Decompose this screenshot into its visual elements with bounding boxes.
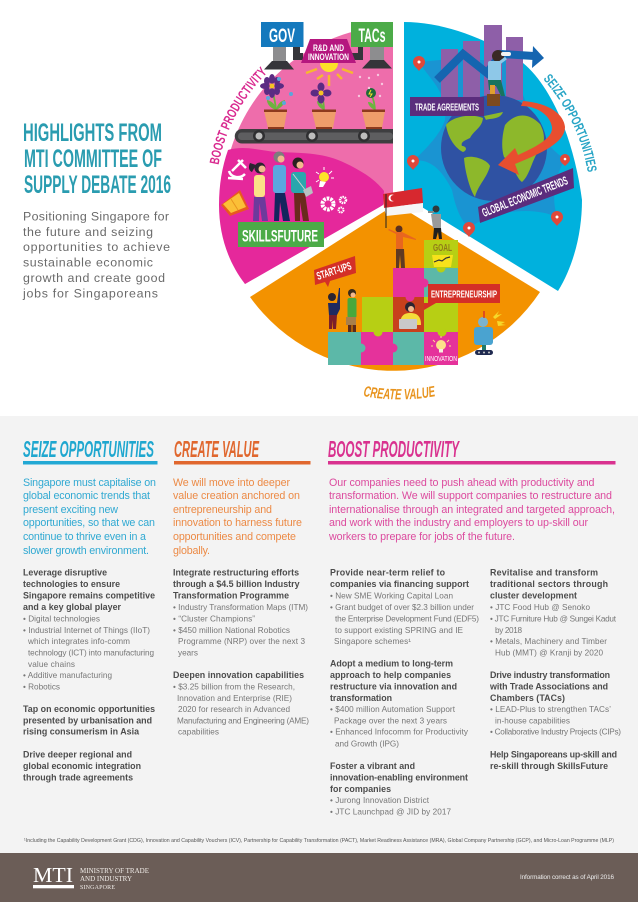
icon: sun (306, 63, 353, 86)
body text: sectors, tacs and skillsfuture: • Metals, Machinery and Timber (490, 637, 607, 646)
body text: create value: • $3.25 billion from the Research, (173, 682, 295, 692)
icon: flower pot two (310, 82, 336, 129)
body text: create value: Programme (NRP) over the next 3 (178, 637, 305, 646)
intro text: boost productivity: Our companies need to push ahead with productivity and (329, 477, 595, 489)
body text: sectors, tacs and skillsfuture: with Trade Associations and (489, 682, 608, 692)
body text: near-term relief and long-term approach: Package over the next 3 years (334, 716, 447, 726)
subtitle text block: jobs for Singaporeans (22, 286, 158, 300)
person: man looking out (428, 206, 442, 239)
body text: near-term relief and long-term approach: to support existing SPRING and IE (335, 626, 464, 635)
body text: near-term relief and long-term approach: innovation-enabling environment (330, 772, 468, 782)
r&d and innovation label: R&D AND (313, 43, 344, 54)
icon: globe (441, 95, 547, 201)
body text: sectors, tacs and skillsfuture: • JTC Food Hub @ Senoko (490, 603, 590, 612)
footnote: ¹Including the Capability Development Grant (CDG), Innovation and Capability Vouchers (ICV), Partnership for Capability Transformation (PACT), Market Readiness Assistance (MRA), Global Company Partnership (GCP), and Micro-Loan Programme (MLP) (24, 838, 614, 844)
body text: near-term relief and long-term approach (330, 568, 479, 817)
body text: create value: Transformation Programme (173, 590, 289, 600)
body text: sectors, tacs and skillsfuture: • JTC Furniture Hub @ Sungei Kadut (490, 614, 617, 624)
intro text: create value: opportunities and compete (173, 531, 296, 543)
body text: near-term relief and long-term approach: Singapore schemes¹ (334, 637, 411, 646)
logo: mti: SINGAPORE (80, 885, 115, 891)
body text: seize opportunities: • Digital technologies (23, 614, 100, 624)
body text: seize opportunities: presented by urbanisation and (23, 715, 152, 725)
r&d and innovation label: INNOVATION (308, 52, 349, 63)
intro text: create value: globally. (173, 545, 210, 557)
intro text: seize opportunities: present exciting new (23, 504, 118, 516)
goal block text and chart: GOAL (433, 243, 452, 254)
body text: seize opportunities: and a key global player (23, 602, 122, 612)
body text: near-term relief and long-term approach: the Enterprise Development Fund (EDF5) (335, 614, 479, 624)
body text: seize opportunities: technology (ICT) into manufacturing (28, 648, 154, 658)
person: older man (273, 152, 290, 221)
body text: seize opportunities: • Additive manufacturing (23, 671, 112, 680)
title: SUPPLY DEBATE 2016 (24, 171, 171, 199)
panel: seize opportunities details (23, 436, 158, 782)
body text: seize opportunities: • Industrial Internet of Things (IIoT) (23, 626, 150, 635)
body text: create value: • $450 million National Robotics (173, 626, 290, 635)
intro text: seize opportunities: Singapore must capitalise on (23, 477, 156, 489)
heading: boost productivity: BOOST PRODUCTIVITY (328, 436, 460, 462)
skillsfuture label (238, 222, 324, 247)
subtitle text block: the future and seizing (23, 225, 153, 239)
curved label: boost productivity: BOOST PRODUCTIVITY (210, 66, 266, 164)
panel: create value segment (250, 188, 540, 371)
intro text: create value: innovation to harness future (173, 517, 302, 529)
icon: singapore flag (383, 188, 423, 228)
intro text: create value (173, 477, 302, 557)
icon: innovation bulb with text (425, 336, 457, 363)
body text: sectors, tacs and skillsfuture: re-skill through SkillsFuture (490, 761, 608, 771)
body text: create value: 2020 for research in Advanced (178, 705, 290, 714)
body text: seize opportunities: through trade agreements (23, 772, 133, 782)
start-ups label (314, 256, 356, 287)
logo: mti: MTI (33, 863, 73, 887)
body text: seize opportunities: Tap on economic opportunities (23, 704, 155, 714)
intro text: create value: We will move into deeper (173, 477, 290, 489)
body text: create value: through a $4.5 billion Industry (173, 579, 300, 589)
intro text: seize opportunities: continue to thrive even in a (23, 531, 146, 543)
panel: boost productivity details (328, 436, 621, 817)
body text: near-term relief and long-term approach: • Enhanced Infocomm for Productivity (330, 728, 469, 737)
logo: mti: MINISTRY OF TRADE (80, 867, 149, 875)
body text: create value (173, 568, 309, 737)
panel: details background (0, 416, 638, 853)
body text: seize opportunities: which integrates info-comm (27, 637, 130, 646)
intro text: create value: entrepreneurship and (173, 504, 272, 516)
body text: seize opportunities: Singapore remains competitive (23, 590, 155, 600)
body text: near-term relief and long-term approach: Provide near-term relief to (330, 568, 446, 578)
body text: sectors, tacs and skillsfuture: Hub (MMT) @ Kranji by 2020 (495, 648, 603, 658)
gov and tacs machinery (261, 22, 393, 70)
body text: near-term relief and long-term approach: transformation (330, 693, 392, 703)
panel: boost productivity segment (219, 22, 393, 284)
body text: near-term relief and long-term approach: approach to help companies (330, 670, 451, 680)
body text: sectors, tacs and skillsfuture: Drive industry transformation (490, 670, 610, 680)
entrepreneurship label (424, 284, 500, 310)
r&d and innovation label (301, 39, 356, 63)
global economic trends label (478, 168, 574, 223)
people: start-up team (328, 288, 356, 332)
body text: near-term relief and long-term approach: restructure via innovation and (330, 682, 457, 692)
subtitle text block: growth and create good (23, 271, 165, 285)
subtitle text block (22, 210, 170, 300)
subtitle text block: sustainable economic (23, 256, 153, 270)
body text: sectors, tacs and skillsfuture: • LEAD-Plus to strengthen TACs’ (490, 705, 611, 714)
person: laptop entrepreneur (399, 302, 421, 329)
curved label: create value (364, 386, 435, 400)
arrow: red curved trend (498, 101, 565, 175)
panel: footer (0, 853, 638, 902)
intro text: boost productivity: workers to prepare for jobs of the future. (328, 531, 515, 543)
body text: sectors, tacs and skillsfuture: • Collaborative Industry Projects (CIPs) (490, 728, 621, 737)
icon: robot (474, 311, 506, 355)
tacs label: TACs (358, 26, 386, 47)
icon: microscope (228, 160, 246, 179)
body text: seize opportunities: value chains (28, 660, 75, 669)
panel: seize opportunities segment (404, 22, 582, 291)
body text: sectors, tacs and skillsfuture: by 2018 (495, 626, 522, 635)
heading: seize opportunities: SEIZE OPPORTUNITIES (23, 436, 154, 462)
intro text: boost productivity: transformation. We will support companies to restructure and (329, 490, 612, 502)
conveyor belt (235, 129, 393, 144)
logo: mti: AND INDUSTRY (80, 875, 132, 883)
body text: create value: Deepen innovation capabilities (173, 670, 304, 680)
body text: seize opportunities (23, 568, 155, 782)
body text: create value: Innovation and Enterprise (RIE) (177, 694, 292, 703)
body text: create value: capabilities (178, 728, 219, 737)
body text: sectors, tacs and skillsfuture: Revitalise and transform (490, 568, 598, 578)
body text: near-term relief and long-term approach: companies via financing support (330, 579, 469, 589)
body text: seize opportunities: global economic integration (23, 761, 141, 771)
intro text: boost productivity: and work with the industry and employers to up-skill our (329, 517, 588, 529)
body text: near-term relief and long-term approach: Adopt a medium to long-term (330, 659, 453, 669)
body text: create value: Integrate restructuring efforts (173, 568, 299, 578)
body text: create value: years (178, 648, 198, 658)
trade agreements label (410, 97, 484, 116)
body text: near-term relief and long-term approach: Foster a vibrant and (330, 761, 415, 771)
icon: flower pot three (358, 74, 385, 129)
intro text: create value: value creation anchored on (173, 490, 300, 502)
title (23, 119, 171, 199)
trade agreements label: TRADE AGREEMENTS (415, 102, 479, 114)
title: HIGHLIGHTS FROM (23, 119, 162, 147)
person: man with flag (388, 226, 416, 268)
skillsfuture label: SKILLSFUTURE (242, 228, 318, 246)
icon: innovation bulb with text: INNOVATION (425, 354, 457, 363)
body text: sectors, tacs and skillsfuture: in-house capabilities (495, 716, 570, 726)
subtitle text block: opportunities to achieve (23, 240, 170, 254)
body text: near-term relief and long-term approach: • New SME Working Capital Loan (330, 591, 453, 600)
subtitle text block: Positioning Singapore for (23, 210, 169, 224)
body text: near-term relief and long-term approach: • Grant budget of over $2.3 billion under (330, 603, 474, 612)
body text: sectors, tacs and skillsfuture: Help Singaporeans up-skill and (490, 750, 617, 760)
entrepreneurship label: ENTREPRENEURSHIP (431, 290, 497, 300)
body text: seize opportunities: Leverage disruptive (23, 568, 107, 578)
intro text: seize opportunities: global economic trends that (23, 490, 150, 502)
heading: create value: CREATE VALUE (174, 436, 259, 462)
body text: near-term relief and long-term approach: • $400 million Automation Support (330, 705, 456, 714)
icon: light bulb (316, 167, 334, 187)
body text: create value: Manufacturing and Engineering (AME) (177, 716, 309, 725)
title: MTI COMMITTEE OF (24, 145, 162, 173)
intro text: seize opportunities: slower growth environment. (23, 545, 149, 557)
icon: map pins (407, 56, 570, 237)
information date note: Information correct as of April 2016 (520, 874, 614, 881)
gov label: GOV (269, 26, 295, 47)
body text: seize opportunities: technologies to ensure (23, 579, 120, 589)
goal block text and chart (432, 243, 453, 267)
intro text: seize opportunities: opportunities, so that we can (23, 517, 155, 529)
bar chart (441, 25, 523, 100)
person: woman with bag (291, 158, 313, 221)
person: tourist with binoculars (487, 50, 511, 106)
intro text: seize opportunities (23, 477, 156, 557)
body text: seize opportunities: Drive deeper regional and (23, 750, 132, 760)
body text: near-term relief and long-term approach: • Jurong Innovation District (330, 796, 430, 805)
body text: sectors, tacs and skillsfuture: Chambers (TACs) (490, 693, 565, 703)
body text: seize opportunities: rising consumerism in Asia (23, 727, 139, 737)
puzzle blocks (328, 240, 458, 365)
curved label: create value: CREATE VALUE (364, 386, 435, 400)
icon: gears (322, 197, 346, 212)
body text: sectors, tacs and skillsfuture (489, 568, 621, 771)
body text: near-term relief and long-term approach: for companies (330, 784, 391, 794)
body text: seize opportunities: • Robotics (23, 682, 60, 692)
intro text: boost productivity: internationalise through an integrated and targeted approach, (329, 504, 615, 516)
icon: flower pot one (260, 74, 293, 129)
intro text: boost productivity (328, 477, 615, 543)
icon: book (221, 190, 249, 216)
body text: near-term relief and long-term approach: • JTC Launchpad @ JID by 2017 (330, 808, 451, 817)
panel: create value details (173, 436, 310, 737)
body text: near-term relief and long-term approach: and Growth (IPG) (335, 740, 399, 748)
arrow: blue trend (437, 46, 544, 80)
person: girl (249, 162, 268, 221)
heading: seize opportunities (23, 436, 158, 464)
logo: mti (33, 863, 149, 891)
curved label: seize opportunities: SEIZE OPPORTUNITIES (544, 74, 597, 172)
body text: create value: • Industry Transformation Maps (ITM) (173, 603, 308, 612)
body text: sectors, tacs and skillsfuture: traditional sectors through (490, 579, 608, 589)
body text: sectors, tacs and skillsfuture: cluster development (490, 590, 577, 600)
body text: create value: • “Cluster Champions” (173, 614, 255, 624)
start-ups label: START-UPS (315, 260, 353, 283)
